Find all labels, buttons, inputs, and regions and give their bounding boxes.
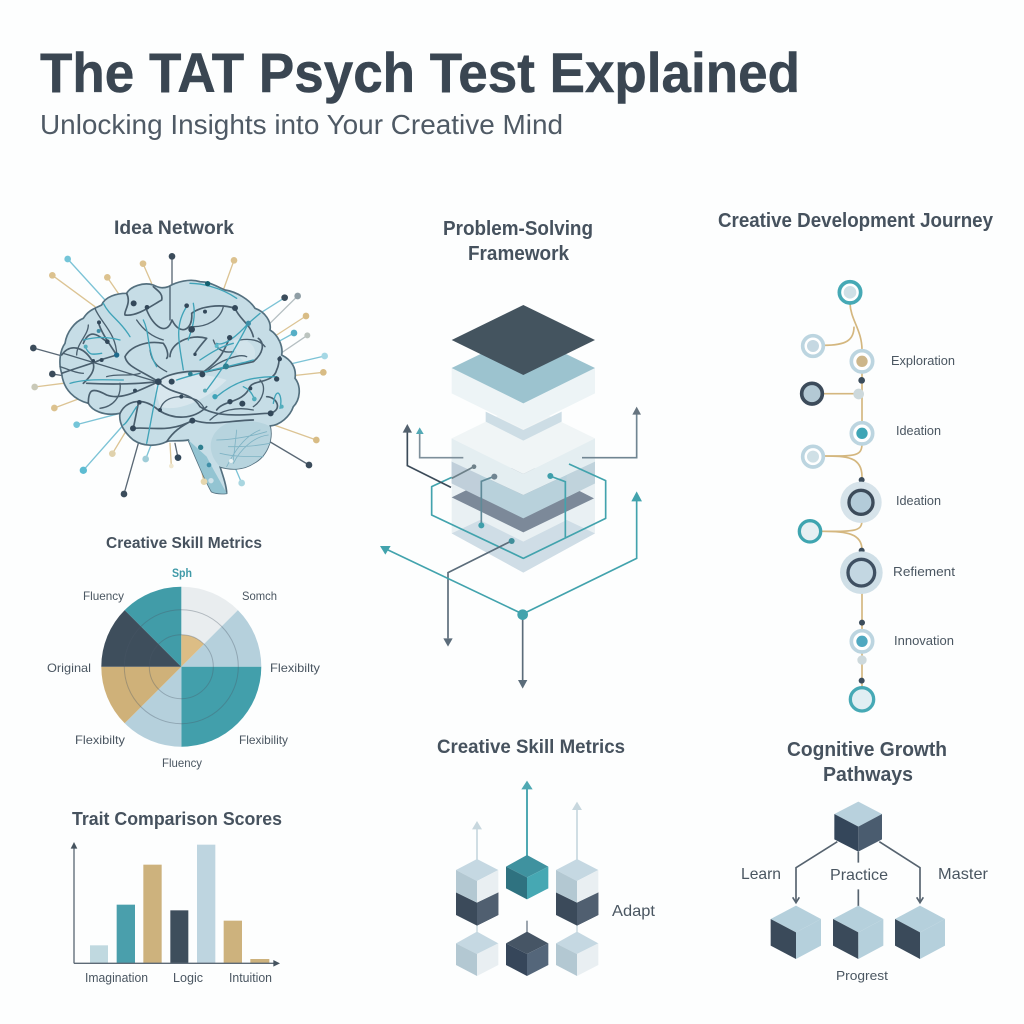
tree labels: Practice: [830, 867, 888, 884]
wheel labels: [47, 566, 320, 770]
wheel labels: Flexibilty: [270, 661, 320, 675]
heading: trait comparison scores: Trait Comparison Scores: [72, 809, 282, 829]
panel: creative skill metrics wheel: [47, 535, 320, 770]
inner nodes: [84, 281, 284, 483]
panel: creative skill metrics cubes: [437, 737, 656, 976]
wheel labels: Sph: [172, 566, 192, 580]
timeline labels: Ideation: [896, 493, 941, 508]
panel: trait comparison scores: [71, 809, 282, 985]
subtitle: Unlocking Insights into Your Creative Mind: [40, 109, 563, 140]
heading: creative development journey: Creative Development Journey: [718, 210, 994, 232]
cube tree diagram: [771, 802, 945, 959]
spokes: [33, 256, 325, 494]
timeline labels: [891, 353, 955, 648]
child cube: middle: [833, 906, 883, 932]
teal branches from hub: [386, 500, 637, 614]
wheel labels: Flexibility: [239, 733, 288, 747]
right column: [556, 892, 598, 926]
outer nodes: [30, 253, 328, 497]
label: adapt: Adapt: [612, 903, 656, 920]
brain body: [60, 280, 299, 494]
panel: cognitive growth pathways: [741, 739, 989, 983]
arrow heads: [403, 424, 412, 433]
heading: cognitive growth pathways: Pathways: [823, 764, 913, 786]
timeline labels: Exploration: [891, 353, 955, 368]
root cube: [834, 802, 882, 827]
teal hexagon outline: [432, 464, 606, 558]
heading: problem-solving framework: [443, 218, 593, 265]
panel: creative development journey: [718, 210, 994, 711]
title: The TAT Psych Test Explained: [40, 41, 800, 104]
timeline labels: Refiement: [893, 564, 955, 579]
heading: cognitive growth pathways: [787, 739, 947, 786]
isometric layered stack: [380, 305, 642, 689]
timeline labels: Innovation: [894, 633, 954, 648]
tree labels: Master: [938, 866, 989, 883]
timeline: [799, 282, 883, 711]
wheel labels: Fluency: [83, 589, 124, 603]
middle column: [506, 855, 548, 877]
timeline labels: Ideation: [896, 423, 941, 438]
child cube: left: [771, 906, 821, 932]
axis labels: Imagination: [85, 970, 148, 985]
dark sulci: [62, 287, 280, 442]
wheel labels: Flexibilty: [75, 733, 125, 747]
wheel labels: Fluency: [162, 756, 202, 770]
heading: creative skill metrics cubes: Creative Skill Metrics: [437, 737, 625, 758]
heading: creative skill metrics: Creative Skill Metrics: [106, 535, 262, 552]
axis labels: Intuition: [229, 970, 272, 985]
panel: problem-solving framework: [380, 218, 642, 689]
cube grid with arrows: [456, 781, 598, 976]
inner connectors: [481, 477, 493, 525]
heading: problem-solving framework: Problem-Solving: [443, 218, 593, 240]
heading: idea network: Idea Network: [114, 218, 234, 239]
tree labels: [741, 866, 989, 983]
axis labels: Logic: [173, 970, 203, 985]
left column: [456, 892, 498, 926]
heading: problem-solving framework: Framework: [468, 243, 570, 265]
wheel labels: Original: [47, 661, 91, 675]
child cube: right: [895, 906, 945, 932]
radial wheel chart: [101, 587, 261, 747]
panel: idea network: [30, 218, 328, 497]
axis labels: [85, 970, 272, 985]
teal sulci: [70, 283, 281, 443]
arrows: [474, 827, 479, 860]
connectors: [793, 842, 923, 907]
tree labels: Learn: [741, 866, 781, 883]
bar chart: [71, 842, 280, 967]
brain illustration: [30, 253, 328, 497]
heading: cognitive growth pathways: Cognitive Growth: [787, 739, 947, 761]
tree labels: Progrest: [836, 968, 888, 983]
wheel labels: Somch: [242, 589, 277, 603]
